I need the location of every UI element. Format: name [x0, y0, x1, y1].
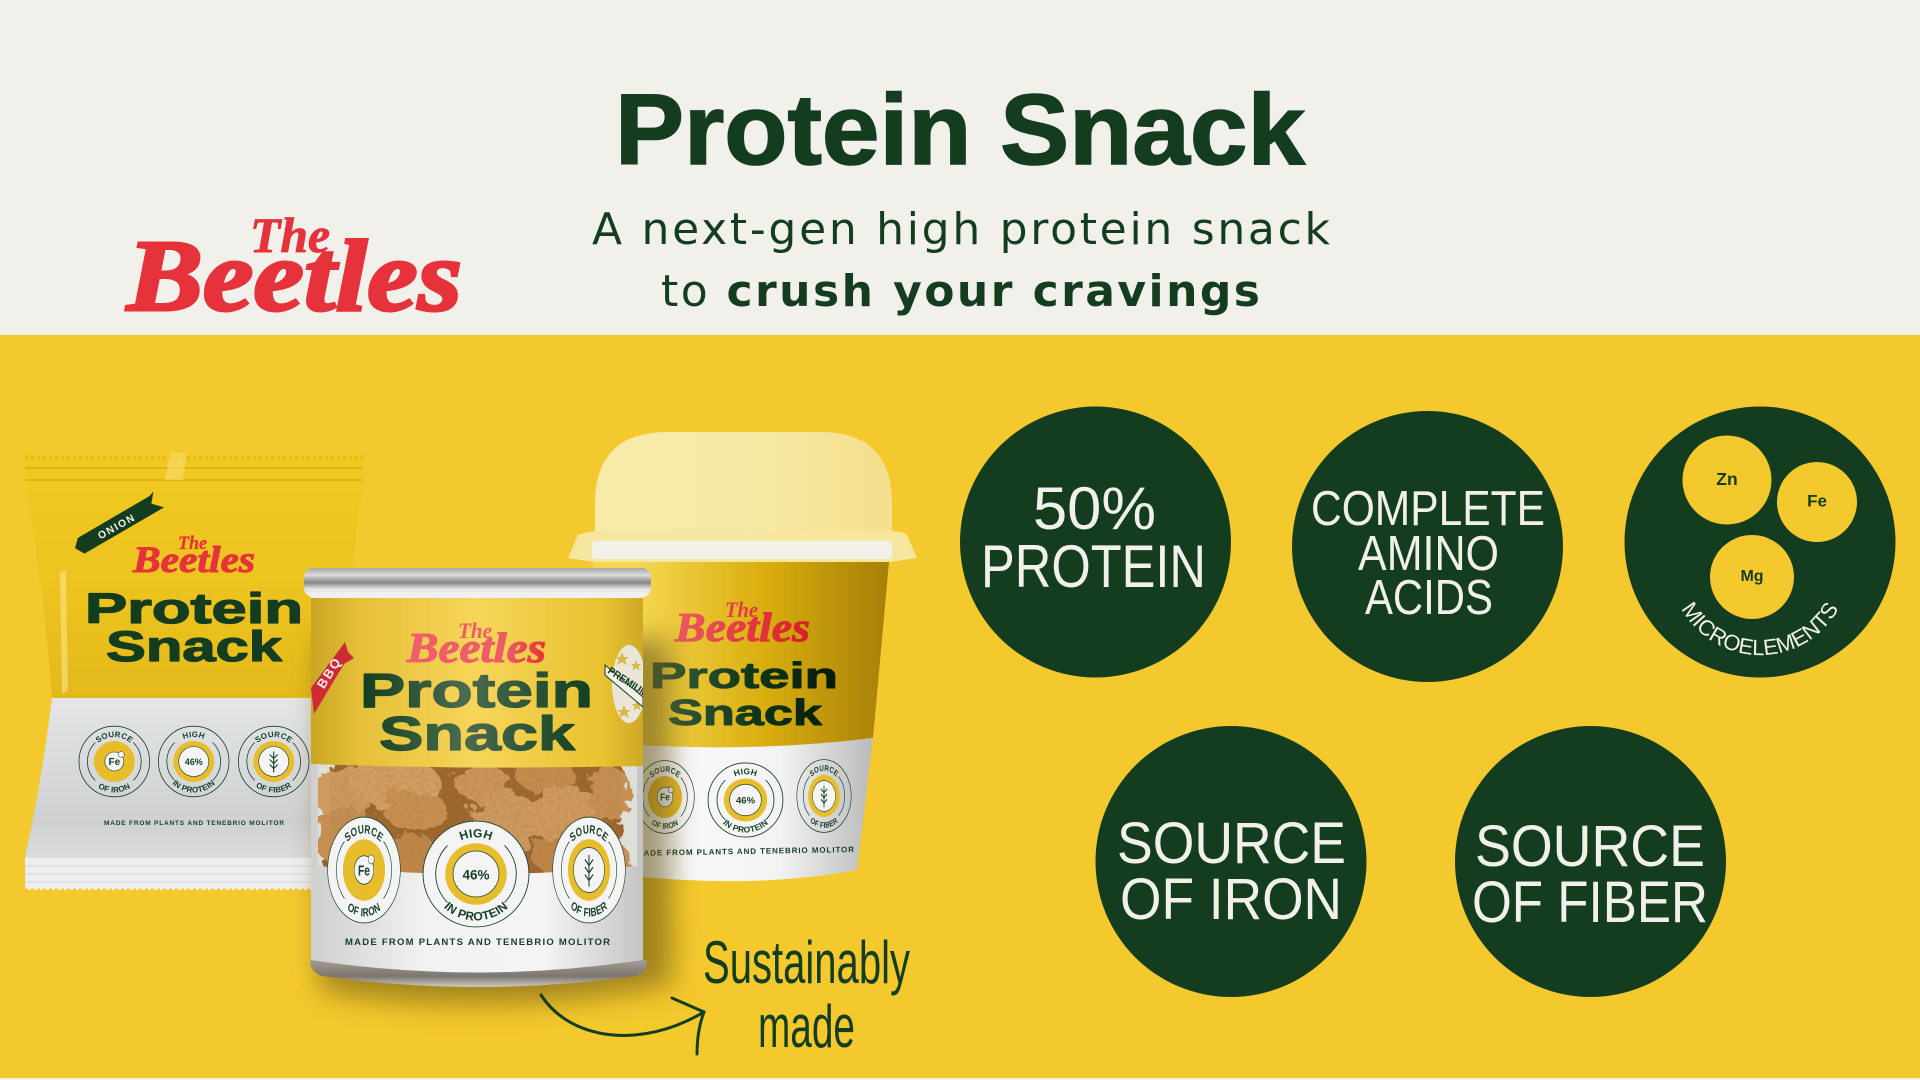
cup yellow body: [593, 562, 889, 747]
can badge: high in protein: 46%: [462, 867, 490, 882]
bag product name: Protein: [85, 585, 303, 633]
element: iron: [1777, 462, 1857, 542]
bag top seal: [25, 453, 363, 480]
element: magnesium: Mg: [1740, 568, 1764, 585]
title: Protein Snack: [615, 74, 1305, 186]
cup badge: high in protein: [708, 762, 784, 838]
cup product name: Snack: [668, 692, 823, 733]
badge: source of iron: OF IRON: [98, 783, 130, 793]
cup lid dome: [595, 432, 892, 532]
element: zinc: [1682, 436, 1772, 524]
cup badge: source of iron: OF IRON: [652, 820, 678, 829]
ribbon: onion: [70, 491, 165, 556]
cup rim band: [592, 541, 892, 559]
badge: source of iron: SOURCE: [96, 732, 134, 743]
cup logo: The: [725, 597, 758, 622]
can badge: source of iron: Fe: [358, 861, 370, 879]
can logo: The: [458, 618, 492, 643]
benefit circle: source of fiber: SOURCE: [1475, 814, 1705, 879]
bag white body: [25, 698, 345, 890]
badge: high in protein: [158, 726, 230, 798]
can white body: [311, 596, 643, 972]
cup badge: high in protein: HIGH: [734, 768, 758, 776]
badge: high in protein: IN PROTEIN: [172, 780, 215, 793]
ribbon: bbq: BBQ: [314, 654, 345, 691]
benefit circle: source of fiber: [1455, 726, 1726, 997]
subtitle: [592, 204, 1331, 317]
ribbon: bbq: [311, 642, 354, 714]
badge: source of fiber: SOURCE: [255, 732, 293, 743]
benefit circle: source of fiber: OF FIBER: [1472, 870, 1708, 935]
bag yellow body: [25, 453, 363, 698]
bag product name: Snack: [106, 623, 282, 671]
badge: source of fiber: OF FIBER: [256, 782, 292, 792]
handwritten note: made: [758, 993, 855, 1060]
can product name: Protein: [360, 665, 593, 718]
subtitle: A next-gen high protein snack: [592, 204, 1331, 255]
badge: source of iron: Fe: [108, 757, 121, 768]
can window: [318, 764, 637, 874]
product: cup: [568, 432, 917, 882]
cup badge: high in protein: 46%: [736, 796, 756, 807]
can product name: Snack: [379, 708, 575, 761]
yellow panel background: [0, 335, 1920, 1078]
handwritten note: Sustainably: [703, 929, 910, 996]
cup logo: Beetles: [674, 604, 810, 650]
arrow: to sustainably made: [541, 995, 704, 1054]
benefit circle: 50% protein: 50%: [1033, 475, 1156, 542]
element: iron: Fe: [1807, 492, 1827, 510]
can badge: high in protein: IN PROTEIN: [444, 902, 508, 921]
benefit circle: complete amino acids: AMINO: [1358, 527, 1499, 581]
header background: [0, 0, 1920, 335]
can bottom rim: [310, 960, 647, 987]
cup product name: Protein: [650, 655, 838, 696]
can badge: high in protein: [422, 820, 530, 928]
cup badge: source of fiber: SOURCE: [810, 765, 839, 777]
cup badge: source of iron: [643, 760, 695, 834]
cup white body: [600, 738, 873, 881]
can top rim: [304, 568, 651, 598]
handwritten note: [703, 929, 910, 1060]
product: snack bag: [25, 453, 363, 890]
snack pieces: [318, 764, 634, 874]
cup badge: high in protein: IN PROTEIN: [723, 819, 768, 833]
element: magnesium: [1710, 535, 1794, 619]
benefit circle: source of iron: SOURCE: [1117, 811, 1346, 876]
can shadow: [320, 640, 672, 1004]
badge: source of fiber: [238, 726, 310, 798]
can badge: source of iron: SOURCE: [344, 824, 384, 842]
premium seal: PREMIUM: [605, 666, 650, 700]
bag product name: [85, 585, 303, 671]
bag highlight: [60, 570, 68, 694]
product: can: [304, 568, 651, 987]
cup product name: [650, 655, 838, 733]
cup footer text: MADE FROM PLANTS AND TENEBRIO MOLITOR: [636, 845, 854, 858]
bag logo: Beetles: [132, 540, 255, 581]
can badge: source of fiber: [552, 816, 626, 924]
benefit circle: complete amino acids: ACIDS: [1365, 571, 1493, 625]
premium seal: [604, 645, 643, 723]
can badge: high in protein: HIGH: [459, 829, 493, 840]
cup badge: source of iron: Fe: [660, 792, 670, 803]
badge: high in protein: 46%: [185, 757, 203, 767]
can product name: [360, 665, 593, 761]
cup badge: source of fiber: OF FIBER: [810, 818, 838, 828]
curved label: MICROELEMENTS: [1682, 602, 1837, 656]
benefit circle: source of iron: [1096, 726, 1366, 997]
cup badge: source of fiber: [796, 759, 852, 833]
bag footer text: MADE FROM PLANTS AND TENEBRIO MOLITOR: [104, 820, 284, 827]
cup flange: [568, 530, 917, 562]
brand logo: The: [250, 207, 330, 263]
badge: high in protein: HIGH: [182, 732, 205, 739]
bag logo: The: [178, 533, 208, 554]
benefit circle: complete amino acids: COMPLETE: [1311, 482, 1545, 536]
cup badge: source of iron: SOURCE: [650, 766, 681, 778]
element: zinc: Zn: [1716, 469, 1738, 489]
benefit circle: 50% protein: PROTEIN: [981, 533, 1206, 600]
ribbon: onion: ONION: [96, 512, 138, 542]
brand logo: Beetles: [126, 220, 462, 333]
can logo: Beetles: [406, 626, 546, 672]
benefit circle: microelements: [1624, 406, 1896, 678]
can badge: source of fiber: SOURCE: [570, 824, 608, 842]
badge: source of iron: [78, 726, 150, 798]
can footer text: MADE FROM PLANTS AND TENEBRIO MOLITOR: [345, 937, 610, 948]
can badge: source of iron: OF IRON: [348, 902, 380, 917]
subtitle: to crush your cravings: [661, 266, 1260, 317]
benefit circle: 50% protein: [960, 406, 1231, 678]
benefit circle: complete amino acids: [1292, 411, 1563, 682]
benefit circle: source of iron: OF IRON: [1120, 867, 1342, 932]
can yellow label: [311, 596, 643, 768]
can badge: source of fiber: OF FIBER: [571, 902, 608, 916]
can badge: source of iron: [327, 816, 401, 924]
bag bottom seal: [25, 858, 345, 890]
